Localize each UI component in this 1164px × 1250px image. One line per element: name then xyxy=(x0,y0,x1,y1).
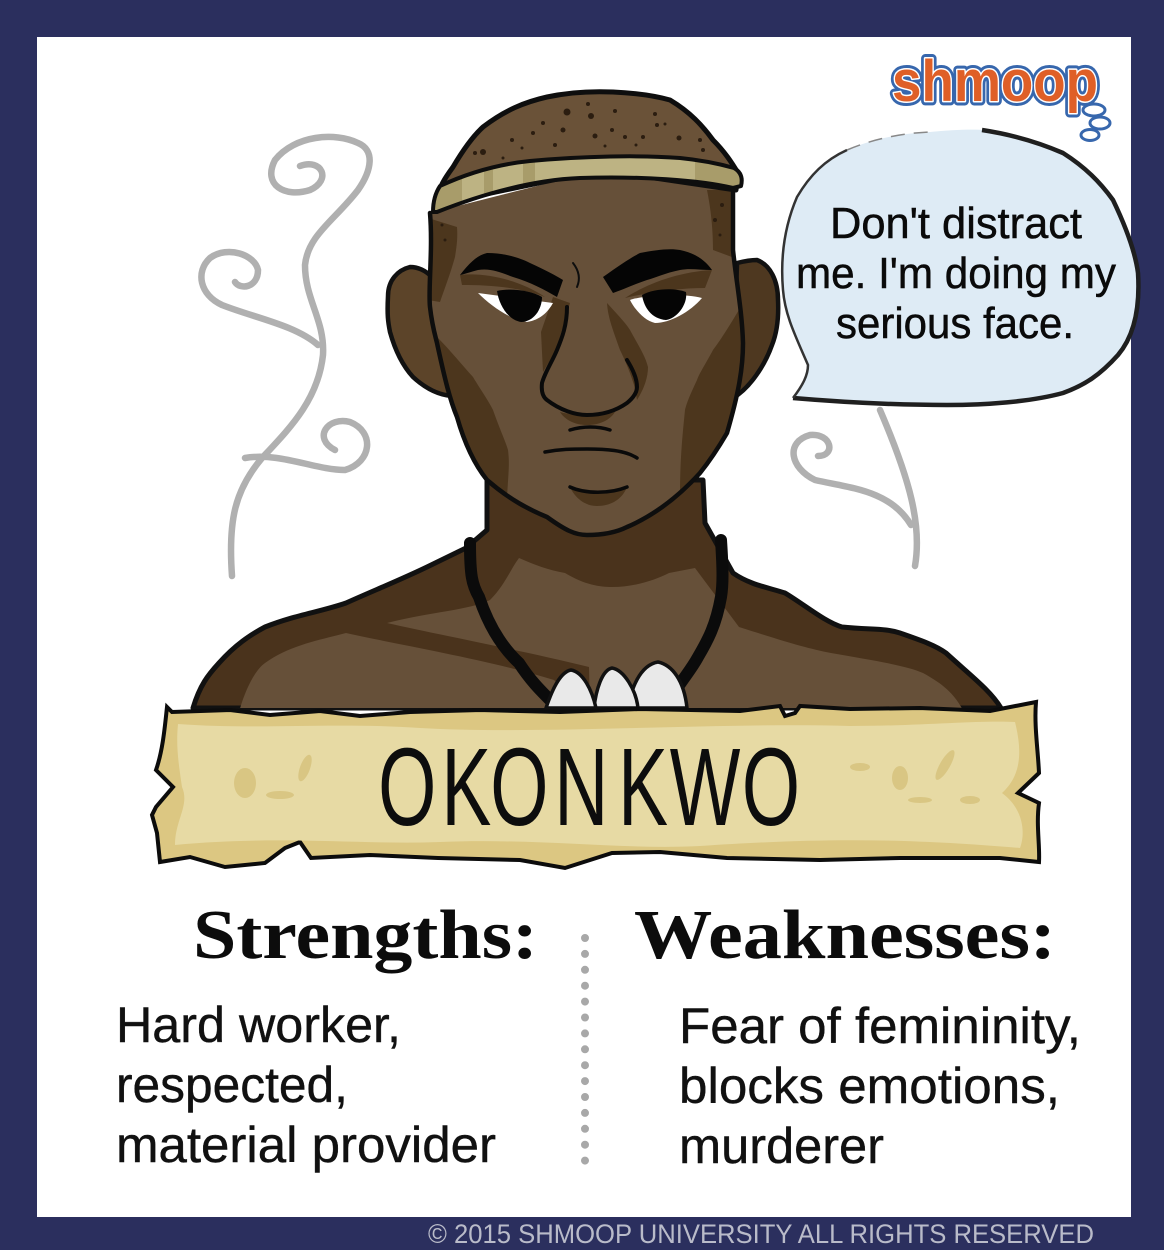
dotted divider xyxy=(581,938,589,1162)
strengths list: Hard worker, xyxy=(116,997,401,1053)
brow crease xyxy=(573,263,579,287)
logo: shmoop: shmoop xyxy=(892,49,1098,114)
eyes xyxy=(478,289,702,323)
icon: left smoke swirl xyxy=(201,137,370,576)
bubble text xyxy=(796,199,1116,348)
hair xyxy=(434,92,738,242)
icon: right smoke swirl xyxy=(794,410,917,566)
headband xyxy=(433,150,742,212)
name banner xyxy=(152,702,1039,868)
copyright footer: © 2015 SHMOOP UNIVERSITY ALL RIGHTS RESERVED xyxy=(428,1219,1094,1249)
weaknesses list xyxy=(679,998,1081,1174)
speech bubble xyxy=(782,130,1138,405)
strengths list: respected, xyxy=(116,1057,348,1113)
weaknesses list: Fear of femininity, xyxy=(679,998,1081,1054)
bubble text: Don't distract xyxy=(830,199,1082,248)
brows xyxy=(460,249,712,297)
character: Okonkwo portrait xyxy=(193,92,1001,712)
weaknesses list: murderer xyxy=(679,1118,884,1174)
necklace cord xyxy=(470,540,722,702)
weaknesses list: blocks emotions, xyxy=(679,1058,1060,1114)
face xyxy=(428,170,750,535)
bubble text: me. I'm doing my xyxy=(796,249,1116,298)
ear: right xyxy=(733,260,778,398)
heading: weaknesses: Weaknesses: xyxy=(634,897,1056,974)
logo: shmoop: shmoop xyxy=(892,49,1098,114)
mouth xyxy=(545,427,637,492)
logo: shmoop xyxy=(892,49,1110,140)
claw pendant xyxy=(546,662,687,708)
banner name: OKONKWO xyxy=(378,726,800,848)
shoulders and chest xyxy=(193,480,1001,712)
heading: strengths: Strengths: xyxy=(193,897,538,974)
strengths list xyxy=(116,997,496,1173)
nose xyxy=(542,307,637,415)
ear: left xyxy=(388,267,452,396)
strengths list: material provider xyxy=(116,1117,496,1173)
bubble text: serious face. xyxy=(836,299,1074,348)
